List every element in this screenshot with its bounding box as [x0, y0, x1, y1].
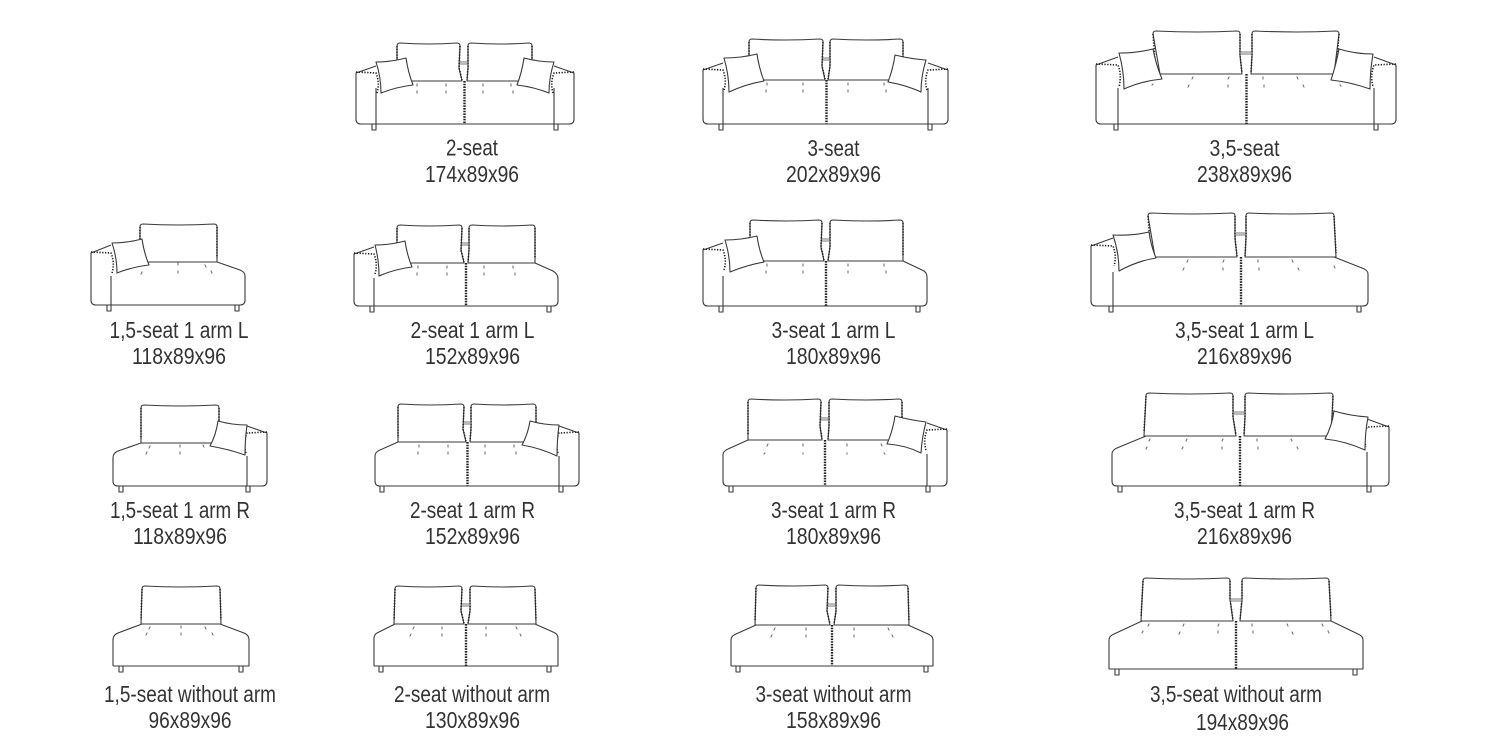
label: 1,5-seat without arm: 96x89x96 — [148, 707, 232, 733]
label: 1,5-seat 1 arm L: 1,5-seat 1 arm L — [110, 317, 249, 343]
label: 1,5-seat 1 arm L — [110, 317, 249, 369]
label: 1,5-seat 1 arm R: 118x89x96 — [133, 523, 227, 549]
label: 3-seat: 3-seat — [808, 135, 860, 161]
sofa: 3-seat — [703, 39, 948, 187]
sofa: 1,5-seat 1 arm R — [110, 405, 267, 549]
label: 2-seat without arm: 2-seat without arm — [394, 681, 550, 707]
label: 2-seat: 174x89x96 — [425, 161, 519, 187]
label: 2-seat: 2-seat — [446, 134, 498, 160]
label: 3-seat 1 arm R: 3-seat 1 arm R — [771, 497, 896, 523]
sofa: 3-seat 1 arm R — [723, 399, 947, 549]
label: 2-seat 1 arm L: 152x89x96 — [425, 343, 520, 369]
label: 3,5-seat — [1197, 135, 1292, 187]
label: 3-seat — [786, 135, 881, 187]
sofa: 3,5-seat without arm — [1109, 578, 1363, 735]
label: 3,5-seat without arm: 3,5-seat without arm — [1150, 681, 1322, 707]
label: 1,5-seat without arm: 1,5-seat without arm — [104, 681, 276, 707]
label: 2-seat 1 arm R: 152x89x96 — [425, 523, 520, 549]
label: 2-seat 1 arm L — [410, 317, 535, 369]
label: 3,5-seat: 238x89x96 — [1197, 161, 1292, 187]
label: 3-seat 1 arm L: 3-seat 1 arm L — [772, 317, 896, 343]
label: 3-seat 1 arm R — [771, 497, 896, 549]
label: 3,5-seat: 3,5-seat — [1210, 135, 1280, 161]
label: 3-seat 1 arm L — [772, 317, 896, 369]
label: 2-seat 1 arm L: 2-seat 1 arm L — [410, 317, 535, 343]
label: 1,5-seat 1 arm L: 118x89x96 — [132, 343, 226, 369]
label: 3-seat 1 arm R: 180x89x96 — [786, 523, 881, 549]
sofa: 1,5-seat 1 arm L — [91, 224, 249, 369]
label: 3-seat without arm: 3-seat without arm — [756, 681, 912, 707]
label: 3-seat without arm: 158x89x96 — [786, 707, 881, 733]
label: 1,5-seat 1 arm R — [110, 497, 250, 549]
label: 2-seat — [425, 134, 519, 187]
sofa: 2-seat — [356, 43, 574, 187]
label: 3,5-seat 1 arm L: 216x89x96 — [1197, 343, 1292, 369]
sofa: 2-seat 1 arm R — [375, 404, 579, 549]
label: 1,5-seat without arm — [104, 681, 276, 733]
label: 3-seat 1 arm L: 180x89x96 — [786, 343, 881, 369]
label: 3,5-seat 1 arm R: 216x89x96 — [1197, 523, 1292, 549]
label: 3,5-seat 1 arm R: 3,5-seat 1 arm R — [1174, 497, 1315, 523]
sofa: 2-seat 1 arm L — [354, 225, 558, 369]
label: 3,5-seat 1 arm L: 3,5-seat 1 arm L — [1175, 317, 1314, 343]
sofa: 1,5-seat without arm — [104, 586, 276, 733]
label: 1,5-seat 1 arm R: 1,5-seat 1 arm R — [110, 497, 250, 523]
sofa: 3,5-seat 1 arm R — [1112, 393, 1389, 549]
label: 2-seat 1 arm R: 2-seat 1 arm R — [410, 497, 535, 523]
sofa: 3-seat without arm — [731, 585, 933, 733]
label: 3,5-seat without arm: 194x89x96 — [1196, 709, 1289, 735]
label: 3-seat: 202x89x96 — [786, 161, 881, 187]
label: 2-seat without arm: 130x89x96 — [425, 707, 520, 733]
label: 3,5-seat without arm — [1150, 681, 1322, 735]
sofa: 3,5-seat — [1096, 31, 1396, 187]
label: 3-seat without arm — [756, 681, 912, 733]
label: 3,5-seat 1 arm L — [1175, 317, 1314, 369]
label: 3,5-seat 1 arm R — [1174, 497, 1315, 549]
sofa: 3,5-seat 1 arm L — [1091, 213, 1368, 369]
sofa: 3-seat 1 arm L — [703, 220, 927, 369]
sofa: 2-seat without arm — [374, 586, 558, 733]
label: 2-seat without arm — [394, 681, 550, 733]
label: 2-seat 1 arm R — [410, 497, 535, 549]
